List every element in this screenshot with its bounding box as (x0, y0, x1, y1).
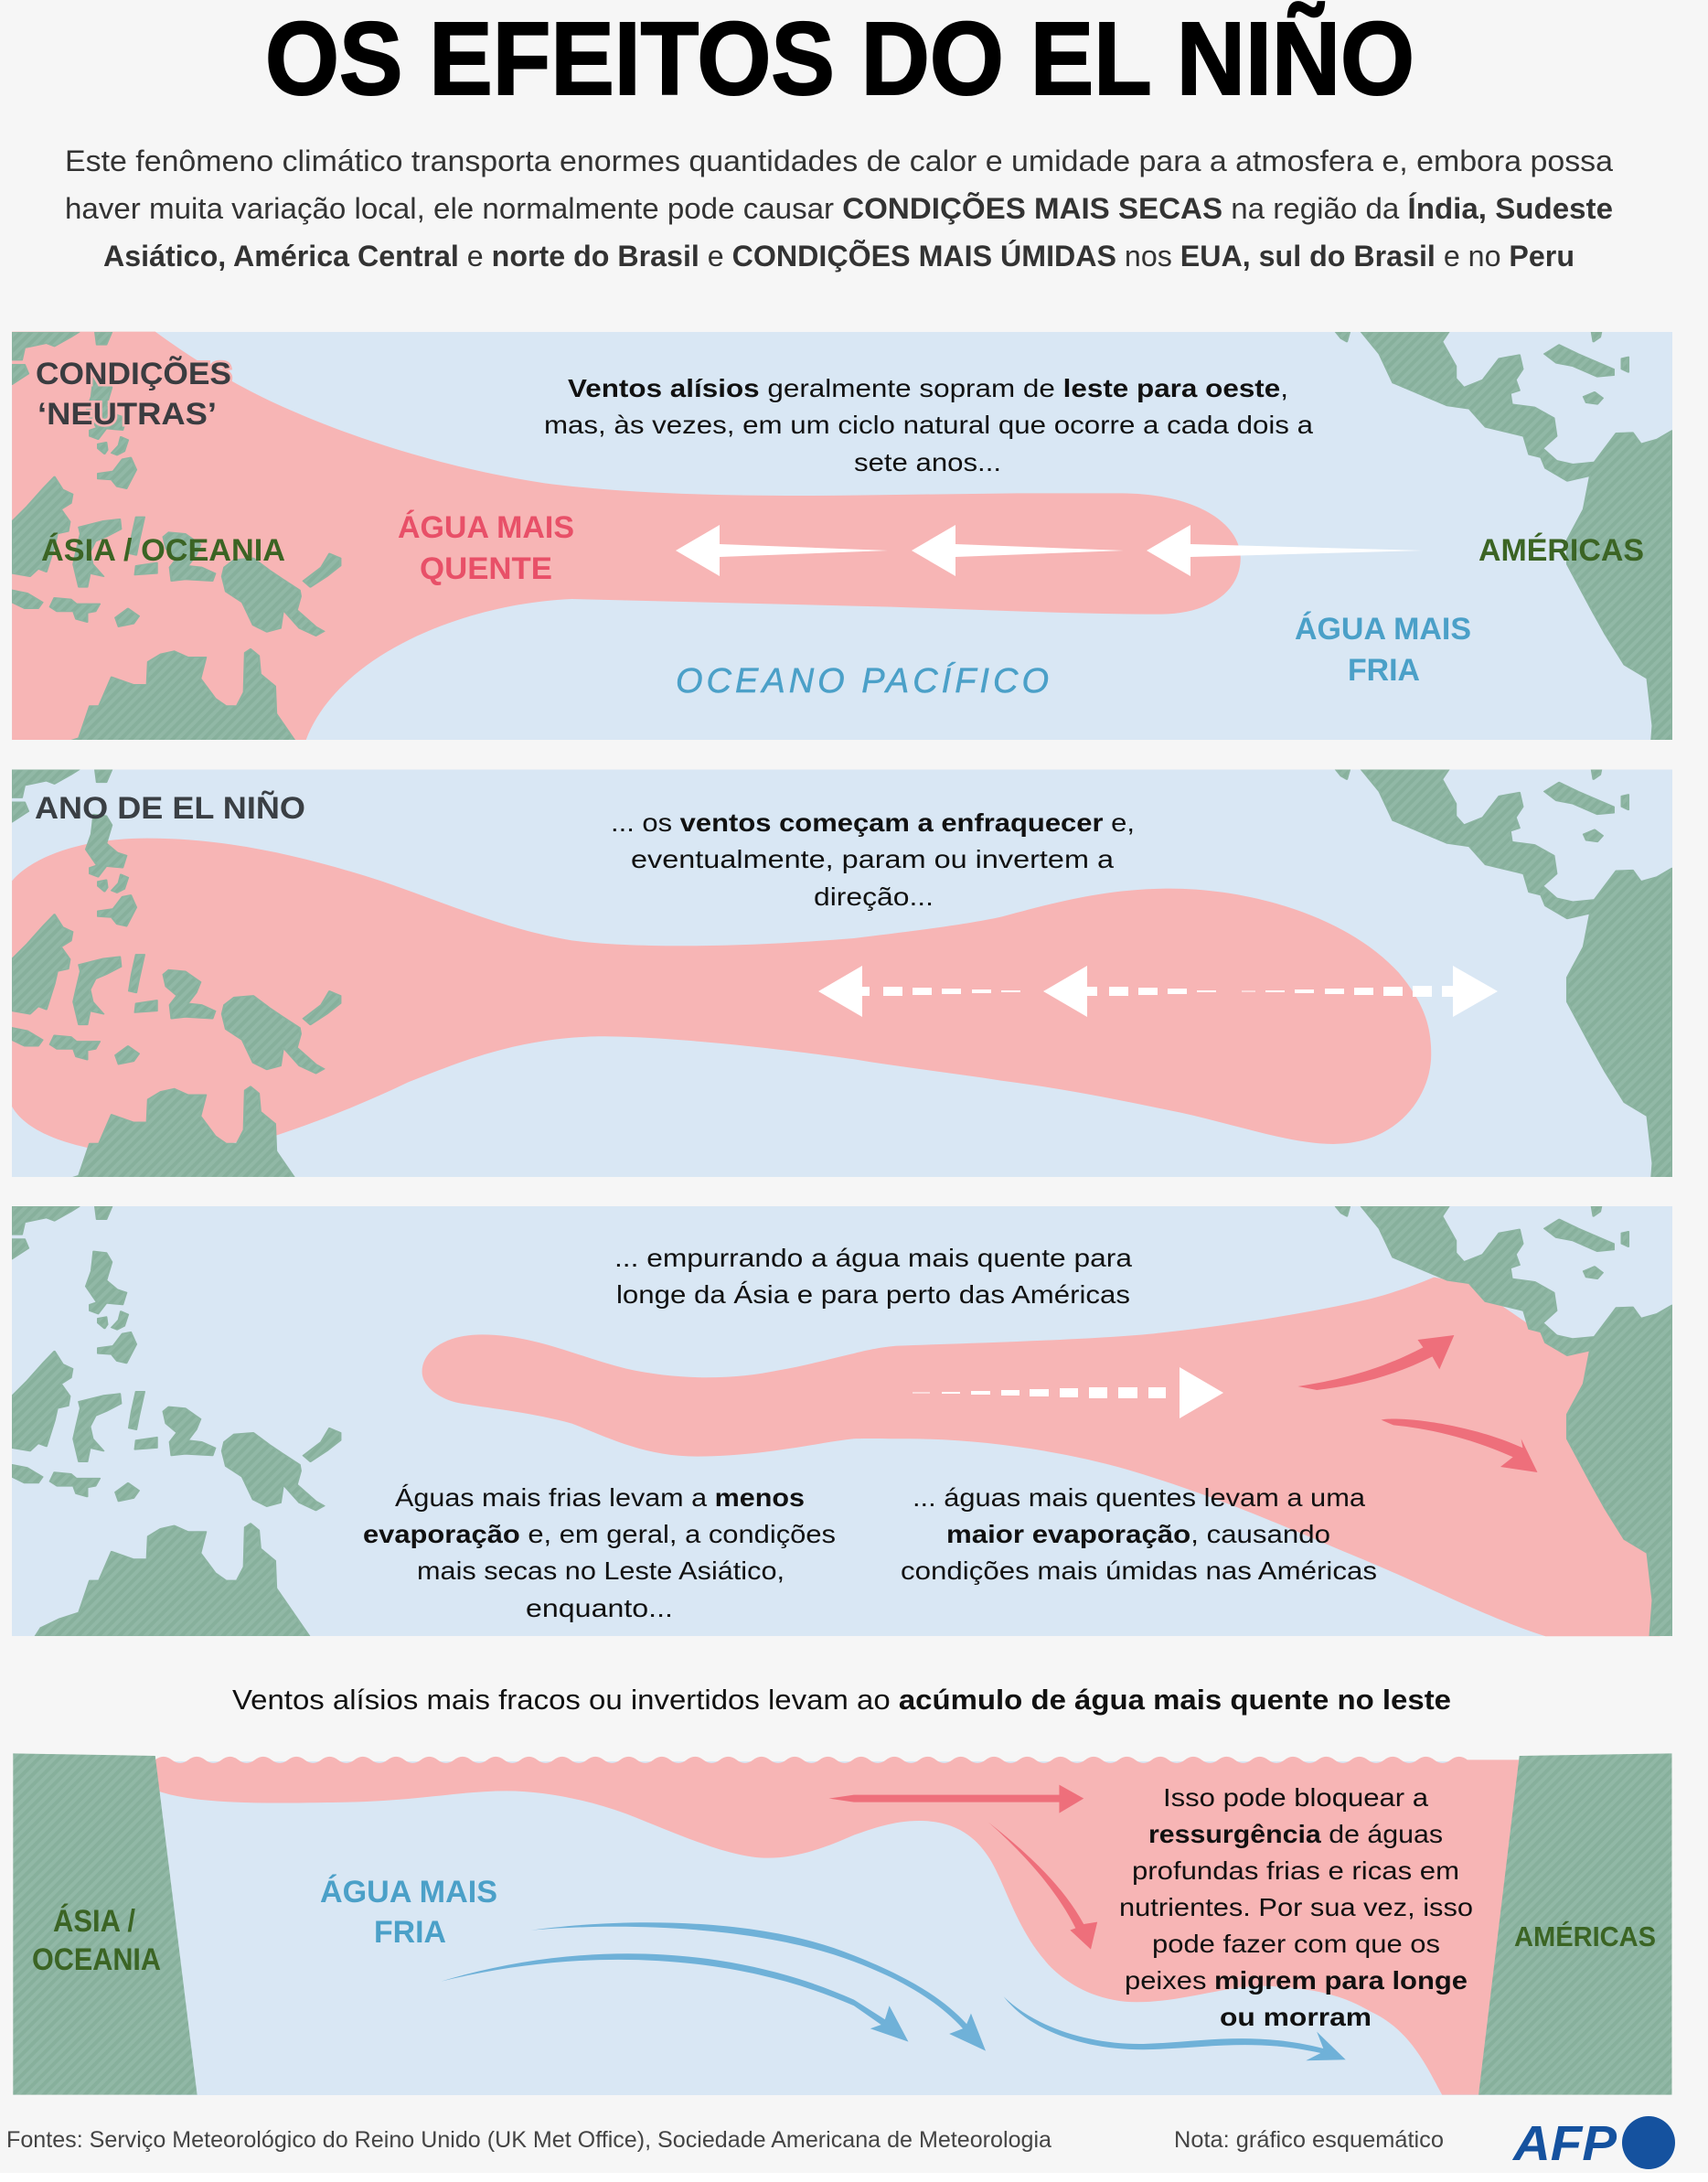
panel: warm water pushed east (12, 1206, 1672, 1636)
text: upwelling blocked: peixes migrem para longe (1125, 1966, 1468, 1995)
label: warmer water (398, 510, 574, 586)
text: winds weaken: direção... (814, 882, 934, 911)
intro text (65, 144, 1613, 273)
label: Pacific Ocean: OCEANO PACÍFICO (676, 661, 1049, 701)
text: upwelling blocked: ressurgência de águas (1148, 1820, 1443, 1848)
heading: cross-section: Ventos alísios mais fracos ou invertidos levam ao acúmulo de água mais quente no leste (232, 1684, 1451, 1716)
label: Asia Oceania: ÁSIA / (53, 1904, 135, 1939)
heading: neutral conditions: ‘NEUTRAS’ (37, 397, 217, 432)
text: more evaporation: condições mais úmidas nas Américas (901, 1556, 1377, 1585)
text: winds weaken: ... os ventos começam a enfraquecer e, (611, 808, 1135, 837)
text: trade winds: Ventos alísios geralmente sopram de leste para oeste , (568, 374, 1288, 402)
map: continents (12, 1206, 1671, 1636)
warm water area (422, 1278, 1660, 1636)
text: less evaporation: Águas mais frias levam a menos (395, 1483, 805, 1512)
warm water area (12, 332, 1241, 740)
panel: neutral conditions (12, 332, 1672, 762)
text: less evaporation (363, 1483, 836, 1622)
text: upwelling blocked: pode fazer com que os (1152, 1930, 1440, 1958)
text: upwelling blocked: ou morram (1220, 2003, 1372, 2031)
label: Americas: AMÉRICAS (1478, 533, 1644, 568)
logo: AFP: AFP (1511, 2116, 1617, 2171)
text: trade winds (544, 374, 1313, 476)
land: Asia Oceania (13, 1753, 197, 2095)
intro text: haver muita variação local, ele normalmente pode causar CONDIÇÕES MAIS SECAS na região da Índia, Sudeste (65, 192, 1613, 225)
warm flow arrows (829, 1785, 1097, 1950)
cold upwelling arrows (441, 1922, 1346, 2060)
text: pushing warm water: ... empurrando a água mais quente para (614, 1244, 1132, 1272)
footer: sources: Fontes: Serviço Meteorológico do Reino Unido (UK Met Office), Sociedade Americana de Meteorologia (6, 2127, 1051, 2153)
map: continents (12, 332, 1671, 762)
heading: El Niño year: ANO DE EL NIÑO (35, 791, 305, 826)
intro text: Asiático, América Central e norte do Brasil e CONDIÇÕES MAIS ÚMIDAS nos EUA, sul do Brasil e no Peru (103, 240, 1575, 273)
intro text: Este fenômeno climático transporta enormes quantidades de calor e umidade para a atmosfera e, embora possa (65, 144, 1613, 177)
warm water layer (155, 1757, 1522, 2095)
text: winds weaken (611, 808, 1135, 911)
text: more evaporation: ... águas mais quentes levam a uma (913, 1483, 1365, 1512)
label: Asia Oceania: ÁSIA / OCEANIA (41, 533, 285, 568)
trade wind arrows (676, 525, 1423, 576)
text: upwelling blocked (1119, 1783, 1473, 2031)
text: pushing warm water (614, 1244, 1132, 1309)
label: colder water: ÁGUA MAIS (1295, 612, 1471, 647)
label: colder water (320, 1875, 497, 1950)
footer: note: Nota: gráfico esquemático (1174, 2127, 1444, 2153)
warm flow arrows (1297, 1335, 1537, 1472)
text: pushing warm water: longe da Ásia e para perto das Américas (616, 1280, 1130, 1309)
label: warmer water: ÁGUA MAIS (398, 510, 574, 545)
label: Americas: AMÉRICAS (1514, 1920, 1656, 1952)
label: colder water: FRIA (1348, 653, 1420, 688)
text: winds weaken: eventualmente, param ou invertem a (631, 845, 1114, 873)
text: trade winds: mas, às vezes, em um ciclo natural que ocorre a cada dois a (544, 411, 1313, 439)
weakening and reversing wind arrows (818, 966, 1498, 1017)
wind arrow pointing east (913, 1367, 1223, 1418)
panel: El Niño year (12, 770, 1672, 1199)
text: more evaporation (901, 1483, 1377, 1585)
text: trade winds: sete anos... (854, 448, 1001, 476)
text: upwelling blocked: Isso pode bloquear a (1163, 1783, 1428, 1812)
title: OS EFEITOS DO EL NIÑO (265, 1, 1414, 116)
warm water area (12, 839, 1431, 1155)
label: colder water: FRIA (374, 1915, 446, 1950)
label: Asia Oceania (32, 1904, 161, 1977)
panel: ocean cross-section (13, 1753, 1671, 2095)
text: more evaporation: maior evaporação , causando (946, 1520, 1330, 1548)
text: upwelling blocked: nutrientes. Por sua vez, isso (1119, 1893, 1473, 1921)
logo: AFP (1511, 2116, 1675, 2171)
label: colder water (1295, 612, 1471, 688)
text: upwelling blocked: profundas frias e ricas em (1132, 1856, 1459, 1885)
map: continents (12, 770, 1671, 1199)
label: colder water: ÁGUA MAIS (320, 1875, 497, 1909)
land: Americas (1478, 1753, 1671, 2095)
text: less evaporation: evaporação e, em geral, a condições (363, 1520, 836, 1548)
text: less evaporation: enquanto... (526, 1594, 673, 1622)
label: warmer water: QUENTE (420, 551, 552, 586)
text: less evaporation: mais secas no Leste Asiático, (417, 1556, 785, 1585)
heading: neutral conditions (36, 357, 231, 432)
heading: neutral conditions: CONDIÇÕES (36, 357, 231, 391)
label: Asia Oceania: OCEANIA (32, 1942, 161, 1977)
